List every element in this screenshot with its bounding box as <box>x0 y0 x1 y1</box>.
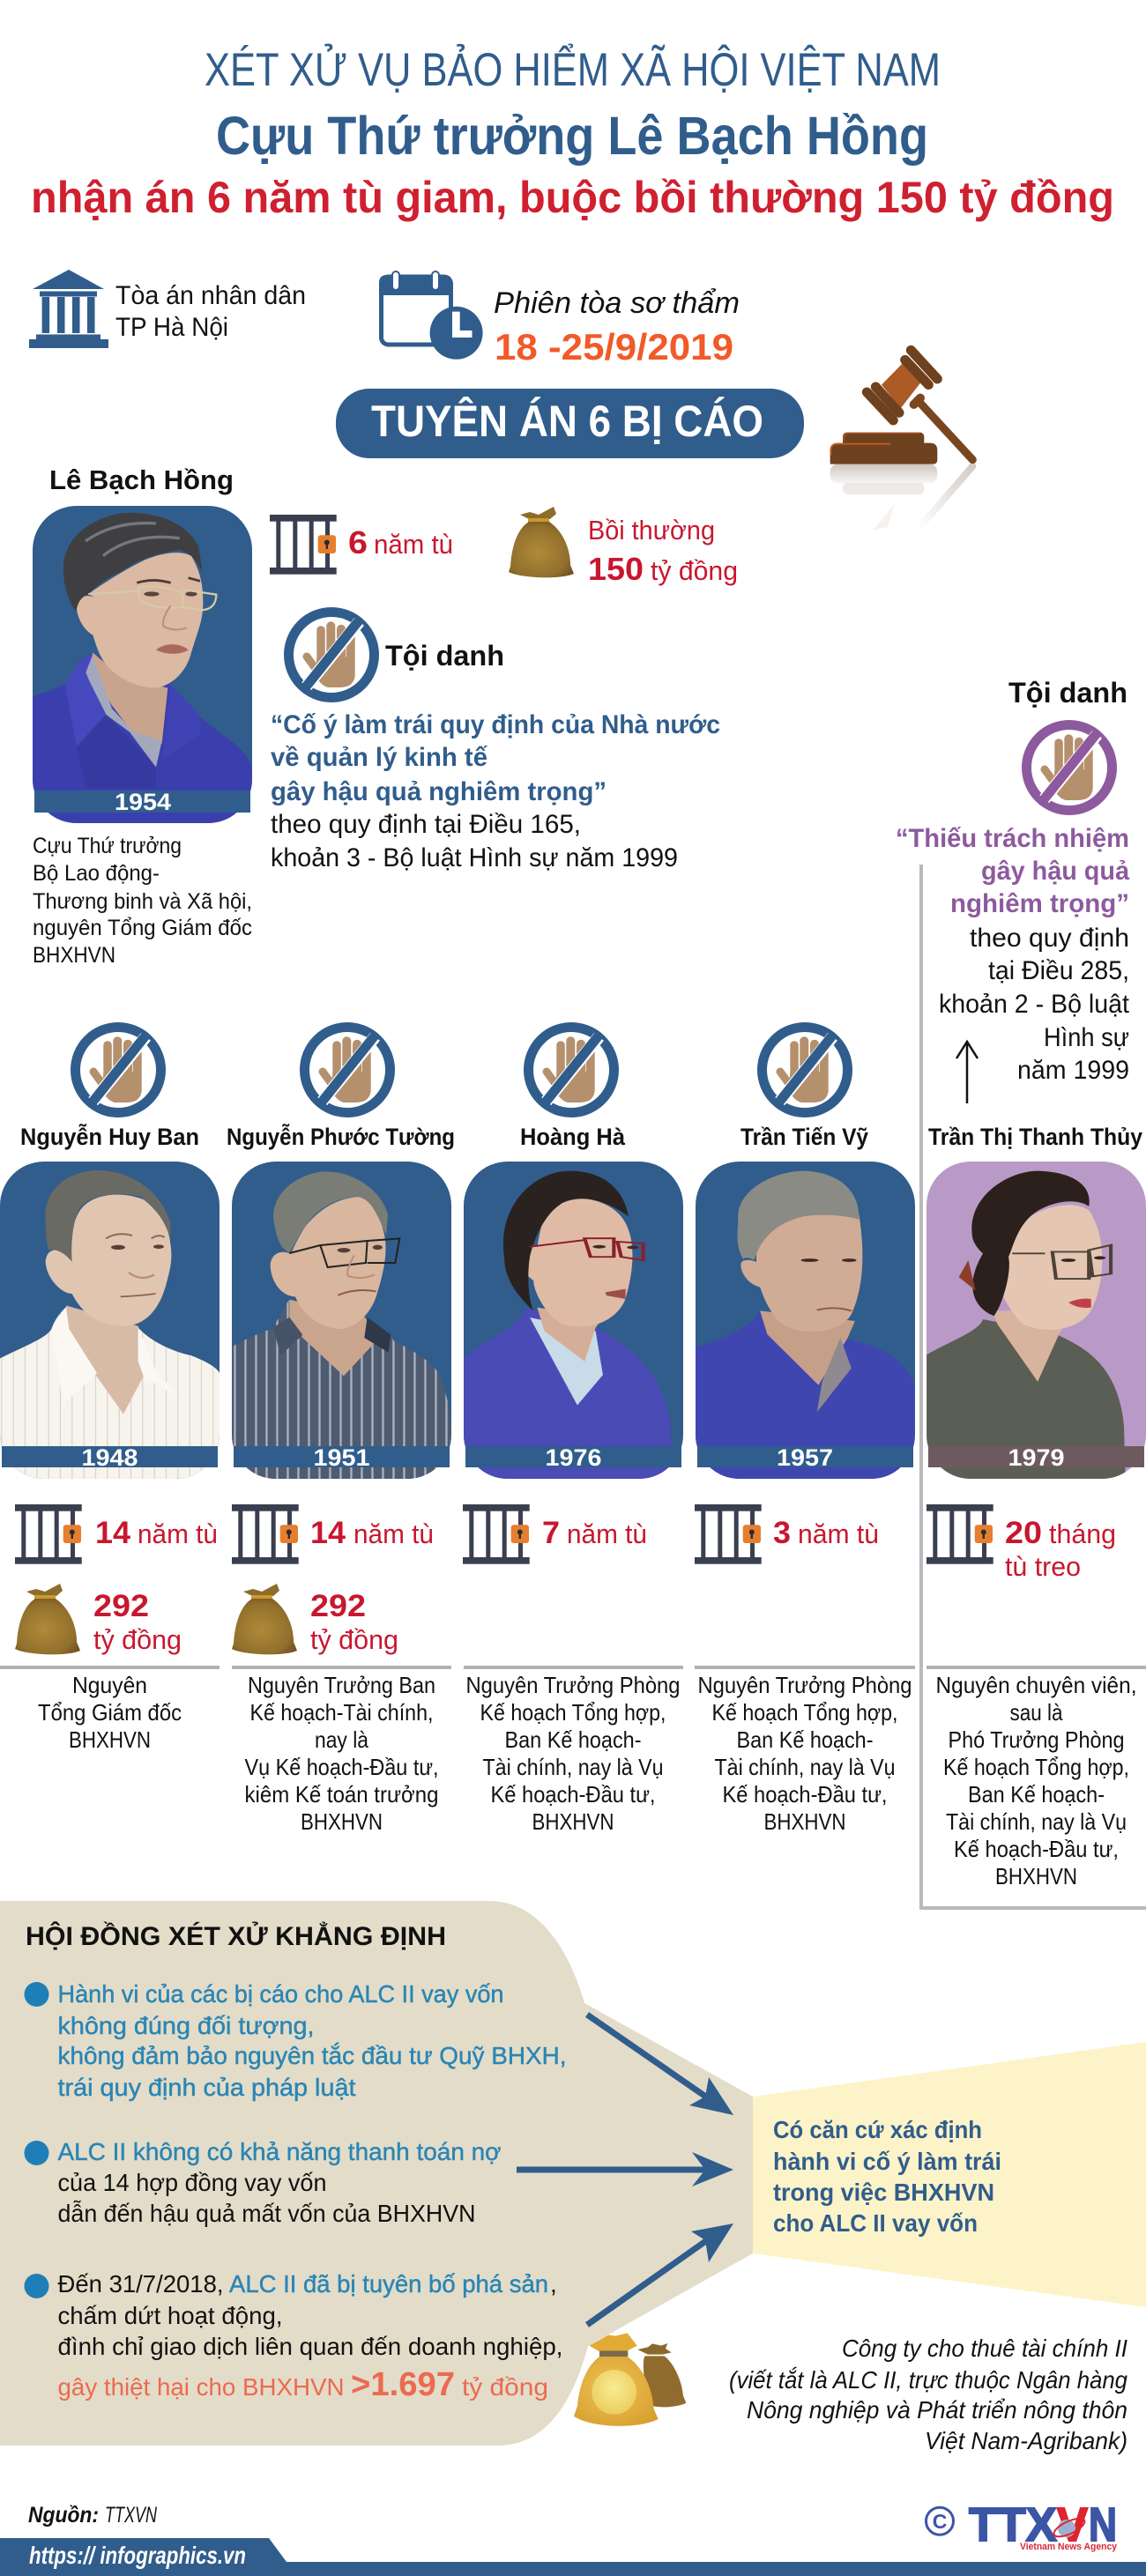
logo: TTXVN: TTX <box>969 2498 1057 2551</box>
icon: gold money bags <box>574 2333 686 2426</box>
role: Trần Thị Thanh Thủy: Nguyên chuyên viên, <box>936 1672 1137 1698</box>
charge: Lê Bạch Hồng: khoản 3 - Bộ luật Hình sự năm 1999 <box>271 843 678 872</box>
charge: Trần Thị Thanh Thủy: theo quy định <box>970 924 1129 953</box>
date text: 18 -25/9/2019 <box>495 326 733 367</box>
finding 1: trái quy định của pháp luật <box>58 2074 356 2101</box>
finding 2 <box>25 2138 501 2227</box>
compensation: 150 billion: Bồi thường <box>588 515 715 546</box>
year band: 1979 <box>1008 1444 1065 1471</box>
role: Nguyễn Phước Tường: nay là <box>315 1726 368 1753</box>
logo: TTXVN <box>926 2498 1118 2552</box>
role: Nguyễn Huy Ban: Nguyên <box>72 1672 147 1698</box>
role: Nguyễn Phước Tường <box>245 1672 439 1835</box>
finding 3: >1.697 <box>351 2366 455 2403</box>
role: Nguyễn Huy Ban: BHXHVN <box>69 1726 151 1753</box>
year band: 1951 <box>314 1444 370 1471</box>
source: TTXVN <box>105 2503 158 2528</box>
caption: Lê Bạch Hồng role: nguyên Tổng Giám đốc <box>33 916 252 940</box>
role: Trần Tiến Vỹ: BHXHVN <box>763 1808 846 1835</box>
sentence: Nguyễn Huy Ban: 292 <box>93 1589 149 1623</box>
panel: conclusion <box>753 2042 1146 2307</box>
defendant names <box>20 1123 1142 1150</box>
role: Trần Thị Thanh Thủy: BHXHVN <box>995 1863 1077 1889</box>
role: Trần Thị Thanh Thủy <box>936 1672 1137 1889</box>
finding 3: gây thiệt hại cho BHXHVN <box>58 2373 344 2401</box>
role: Nguyễn Phước Tường: Vụ Kế hoạch-Đầu tư, <box>245 1754 439 1780</box>
sentence: Hoàng Hà: 7 <box>542 1516 560 1550</box>
year band: 1948 <box>81 1444 138 1471</box>
charge: Trần Thị Thanh Thủy: “Thiếu trách nhiệm <box>896 824 1129 853</box>
portrait card: Trần Tiến Vỹ <box>695 1162 915 1480</box>
sentence: Trần Thị Thanh Thủy <box>926 1504 1116 1582</box>
panel: conclusion: cho ALC II vay vốn <box>773 2209 978 2237</box>
sentence: Nguyễn Phước Tường <box>232 1504 434 1655</box>
panel: conclusion: hành vi cố ý làm trái <box>773 2148 1001 2175</box>
arrow: finding 3 to conclusion <box>587 2223 733 2325</box>
charge: Trần Thị Thanh Thủy: khoản 2 - Bộ luật <box>939 990 1130 1019</box>
finding 1 <box>25 1980 566 2101</box>
sentence: Trần Thị Thanh Thủy: tù treo <box>1005 1551 1081 1582</box>
sentence: 6 years: năm tù <box>374 529 453 560</box>
role: Trần Tiến Vỹ: Nguyên Trưởng Phòng <box>698 1672 912 1698</box>
role: Nguyễn Huy Ban: Tổng Giám đốc <box>38 1699 182 1726</box>
sentence: Trần Tiến Vỹ: 3 <box>773 1516 791 1550</box>
sentence: 6 years <box>270 515 453 575</box>
icon: gavel <box>830 350 972 531</box>
finding 2: dẫn đến hậu quả mất vốn của BHXHVN <box>58 2200 476 2227</box>
role: Trần Tiến Vỹ: Ban Kế hoạch- <box>737 1726 873 1753</box>
source <box>28 2503 158 2528</box>
portrait card: Trần Thị Thanh Thủy <box>926 1162 1146 1480</box>
role: Trần Thị Thanh Thủy: Kế hoạch-Đầu tư, <box>954 1836 1119 1862</box>
sentence: Nguyễn Huy Ban: tỷ đồng <box>93 1624 182 1655</box>
sentence: Nguyễn Phước Tường: năm tù <box>353 1518 434 1549</box>
finding 3: , <box>550 2270 557 2298</box>
role: Nguyễn Phước Tường: BHXHVN <box>301 1808 383 1835</box>
defendant names: Nguyễn Huy Ban <box>20 1123 199 1150</box>
charge: Lê Bạch Hồng <box>271 612 720 872</box>
icon: courthouse <box>29 270 108 348</box>
portrait card: Hoàng Hà <box>464 1162 683 1480</box>
role: Hoàng Hà: Kế hoạch-Đầu tư, <box>490 1781 656 1808</box>
name: Lê Bạch Hồng: Lê Bạch Hồng <box>49 464 234 495</box>
verdict banner <box>336 389 804 458</box>
icons: charge hand for four defendants <box>76 1028 848 1112</box>
arrow: up to charge <box>956 1042 978 1103</box>
footer band: https:// infographics.vn <box>29 2542 246 2569</box>
column divider bars <box>0 1666 1146 1669</box>
panel: conclusion: trong việc BHXHVN <box>773 2179 994 2206</box>
sentence: Nguyễn Huy Ban <box>15 1504 218 1655</box>
date text <box>494 286 740 367</box>
charge: Lê Bạch Hồng: theo quy định tại Điều 165, <box>271 810 581 839</box>
sentence: Nguyễn Phước Tường: tỷ đồng <box>310 1624 398 1655</box>
caption: Lê Bạch Hồng role: Thương binh và Xã hội, <box>33 889 252 914</box>
logo: TTXVN: C <box>933 2510 947 2533</box>
title: XÉT XỬ VỤ BẢO HIỂM XÃ HỘI VIỆT NAM <box>205 43 941 96</box>
verdict banner: TUYÊN ÁN 6 BỊ CÁO <box>371 397 763 446</box>
defendant names: Nguyễn Phước Tường <box>227 1123 455 1150</box>
arrow: finding 1 to conclusion <box>587 2015 733 2115</box>
role: Hoàng Hà: Nguyên Trưởng Phòng <box>465 1672 681 1698</box>
note: ALC II definition: Việt Nam-Agribank) <box>925 2427 1127 2454</box>
finding 1: không đúng đối tượng, <box>58 2012 314 2039</box>
finding 3: Đến 31/7/2018, <box>58 2270 224 2298</box>
charge: Trần Thị Thanh Thủy: gây hậu quả <box>981 857 1129 886</box>
charge: Trần Thị Thanh Thủy: tại Điều 285, <box>988 956 1129 985</box>
year band <box>2 1444 218 1471</box>
caption: Lê Bạch Hồng role: Bộ Lao động- <box>33 861 160 886</box>
role: Trần Tiến Vỹ: Kế hoạch Tổng hợp, <box>712 1699 897 1726</box>
logo: TTXVN: N <box>1089 2498 1117 2551</box>
compensation: 150 billion: tỷ đồng <box>651 555 738 586</box>
arrow: finding 2 to conclusion <box>517 2152 733 2186</box>
year band <box>465 1444 681 1471</box>
defendant names: Hoàng Hà <box>520 1124 626 1150</box>
year band <box>928 1444 1144 1471</box>
year band <box>34 789 250 815</box>
defendant names: Trần Tiến Vỹ <box>740 1124 868 1150</box>
title <box>31 43 1114 222</box>
sentence: Trần Tiến Vỹ: năm tù <box>798 1518 879 1549</box>
court info <box>29 270 306 348</box>
court name <box>115 281 306 342</box>
year band: 1954 <box>115 789 171 815</box>
role: Hoàng Hà: BHXHVN <box>532 1808 614 1835</box>
sentence: Nguyễn Phước Tường: 14 <box>310 1516 346 1550</box>
trial date <box>379 271 740 367</box>
charge: Trần Thị Thanh Thủy: Hình sự <box>1044 1023 1129 1052</box>
finding 2: ALC II không có khả năng thanh toán nợ <box>58 2138 501 2165</box>
year band: 1976 <box>545 1444 601 1471</box>
court name: TP Hà Nội <box>115 313 228 342</box>
caption: Lê Bạch Hồng role: Cựu Thứ trưởng <box>33 834 182 858</box>
panel heading: HỘI ĐỒNG XÉT XỬ KHẲNG ĐỊNH <box>26 1921 446 1951</box>
finding 3: đình chỉ giao dịch liên quan đến doanh nghiệp, <box>58 2333 562 2360</box>
portrait card: Nguyễn Huy Ban <box>0 1162 220 1481</box>
panel: conclusion: Có căn cứ xác định <box>773 2116 982 2143</box>
role: Hoàng Hà: Tài chính, nay là Vụ <box>483 1754 663 1780</box>
caption: Lê Bạch Hồng role: BHXHVN <box>33 943 115 968</box>
finding 3: chấm dứt hoạt động, <box>58 2302 282 2329</box>
sentence: Nguyễn Huy Ban: năm tù <box>138 1518 218 1549</box>
portrait card: Nguyễn Phước Tường <box>232 1162 451 1481</box>
charge: Lê Bạch Hồng: về quản lý kinh tế <box>271 743 487 772</box>
role: Nguyễn Phước Tường: Nguyên Trưởng Ban <box>248 1672 435 1698</box>
role: Trần Thị Thanh Thủy: Phó Trưởng Phòng <box>949 1726 1125 1753</box>
sentence: Nguyễn Phước Tường: 292 <box>310 1589 366 1623</box>
charge: Lê Bạch Hồng: Tội danh <box>385 640 504 672</box>
role: Trần Tiến Vỹ <box>698 1672 912 1835</box>
charge: Trần Thị Thanh Thủy: nghiêm trọng” <box>950 889 1129 918</box>
court name: Tòa án nhân dân <box>115 281 306 310</box>
role: Hoàng Hà: Ban Kế hoạch- <box>504 1726 642 1753</box>
footer band <box>0 2538 1146 2576</box>
role: Nguyễn Huy Ban <box>38 1672 182 1753</box>
role: Trần Tiến Vỹ: Tài chính, nay là Vụ <box>714 1754 896 1780</box>
panel: trial panel findings <box>0 1901 753 2446</box>
caption: Lê Bạch Hồng role <box>33 834 252 968</box>
role: Trần Thị Thanh Thủy: sau là <box>1010 1699 1063 1726</box>
icon: calendar and clock <box>379 271 483 360</box>
year band <box>697 1444 913 1471</box>
title: nhận án 6 năm tù giam, buộc bồi thường 150 tỷ đồng <box>31 173 1114 222</box>
role: Trần Thị Thanh Thủy: Tài chính, nay là Vụ <box>946 1808 1127 1835</box>
role: Trần Thị Thanh Thủy: Ban Kế hoạch- <box>968 1781 1105 1808</box>
note: ALC II definition: Công ty cho thuê tài chính II <box>842 2335 1127 2362</box>
logo: TTXVN: Vietnam News Agency <box>1020 2542 1118 2552</box>
compensation: 150 billion <box>509 507 738 587</box>
charge: Trần Thị Thanh Thủy: Tội danh <box>1008 677 1127 709</box>
source: Nguồn: <box>28 2503 99 2528</box>
date text: Phiên tòa sơ thẩm <box>494 286 740 320</box>
charge: Trần Thị Thanh Thủy <box>896 677 1130 1085</box>
compensation: 150 billion: 150 <box>588 551 644 587</box>
finding 1: không đảm bảo nguyên tắc đầu tư Quỹ BHXH, <box>58 2042 566 2069</box>
sentence: Hoàng Hà <box>463 1504 647 1564</box>
role: Trần Thị Thanh Thủy: Kế hoạch Tổng hợp, <box>943 1754 1129 1780</box>
year band: 1957 <box>777 1444 833 1471</box>
portrait card: Lê Bạch Hồng <box>33 506 253 825</box>
role: Trần Tiến Vỹ: Kế hoạch-Đầu tư, <box>723 1781 887 1808</box>
logo: TTXVN: V <box>1057 2498 1088 2551</box>
role: Nguyễn Phước Tường: Kế hoạch-Tài chính, <box>250 1699 434 1726</box>
sentence: Trần Thị Thanh Thủy: 20 <box>1005 1516 1042 1550</box>
role: Hoàng Hà <box>465 1672 681 1835</box>
bracket around Trần Thị Thanh Thủy column <box>921 865 1146 1908</box>
title: Cựu Thứ trưởng Lê Bạch Hồng <box>216 106 928 166</box>
note: ALC II definition: Nông nghiệp và Phát triển nông thôn <box>747 2396 1127 2424</box>
charge: Lê Bạch Hồng: gây hậu quả nghiêm trọng” <box>271 777 606 806</box>
finding 2: của 14 hợp đồng vay vốn <box>58 2169 326 2196</box>
sentence: Nguyễn Huy Ban: 14 <box>95 1516 131 1550</box>
charge: Lê Bạch Hồng: “Cố ý làm trái quy định của Nhà nước <box>271 710 720 739</box>
sentence: 6 years: 6 <box>348 524 368 560</box>
panel background <box>0 1901 753 2446</box>
role: Hoàng Hà: Kế hoạch Tổng hợp, <box>480 1699 666 1726</box>
finding 3: ALC II đã bị tuyên bố phá sản <box>229 2270 548 2298</box>
role: Nguyễn Phước Tường: kiêm Kế toán trưởng <box>245 1781 439 1808</box>
year band <box>234 1444 450 1471</box>
finding 1: Hành vi của các bị cáo cho ALC II vay vốn <box>58 1980 504 2008</box>
note: ALC II definition <box>729 2335 1127 2454</box>
charge: Trần Thị Thanh Thủy: năm 1999 <box>1017 1056 1129 1085</box>
finding 3 <box>25 2270 562 2403</box>
finding 3: tỷ đồng <box>462 2373 548 2401</box>
sentence: Hoàng Hà: năm tù <box>567 1518 647 1549</box>
sentence: Trần Tiến Vỹ <box>695 1504 879 1564</box>
sentence: Trần Thị Thanh Thủy: tháng <box>1049 1518 1116 1549</box>
